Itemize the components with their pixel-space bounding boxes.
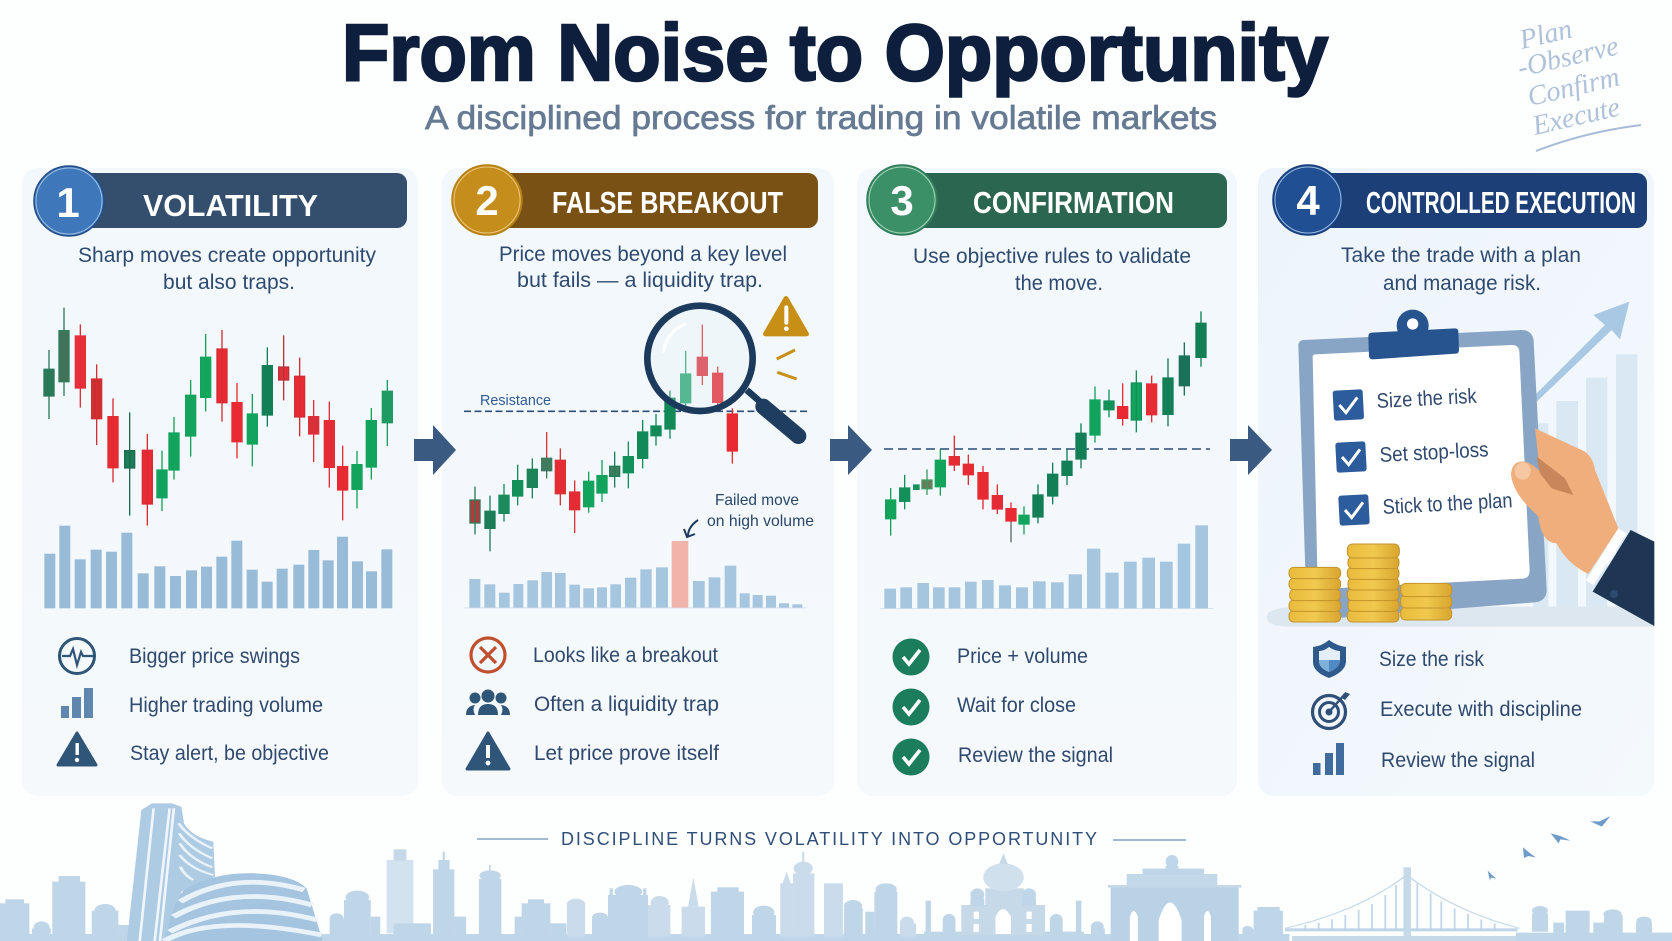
callout: failed move: on high volume bbox=[707, 513, 814, 530]
icon: group bbox=[466, 690, 510, 715]
panel: false breakout bbox=[442, 165, 834, 796]
resistance line bbox=[464, 410, 808, 412]
icon: warning triangle bbox=[765, 298, 807, 379]
header: step 2 false breakout: 2 bbox=[475, 177, 499, 224]
suspension bridge bbox=[1285, 867, 1520, 941]
icon: shield bbox=[1313, 640, 1346, 678]
volume bars bbox=[44, 526, 392, 608]
header: step 4 controlled execution bbox=[1273, 165, 1647, 235]
clipboard bbox=[1303, 310, 1542, 615]
icon: check bbox=[892, 638, 930, 676]
checkbox 1 bbox=[1333, 389, 1364, 421]
header: step 4 controlled execution: 4 bbox=[1296, 177, 1320, 224]
item text: Higher trading volume bbox=[129, 694, 323, 717]
header: step 1 volatility bbox=[34, 166, 407, 236]
panel: controlled execution bbox=[1258, 165, 1654, 796]
panel: volatility bbox=[22, 166, 418, 796]
icon: cross circle bbox=[471, 638, 505, 672]
checklist text: Set stop-loss bbox=[1379, 438, 1489, 467]
arrow 1 bbox=[414, 425, 456, 475]
title: From Noise to Opportunity bbox=[342, 8, 1328, 97]
confirmation level line bbox=[884, 448, 1210, 450]
item text: Price + volume bbox=[957, 645, 1088, 668]
skyline right: monuments and bridge bbox=[836, 853, 1672, 941]
item text: Execute with discipline bbox=[1380, 698, 1582, 721]
icon: check bbox=[892, 688, 930, 726]
handwritten note: Execute bbox=[1529, 92, 1623, 142]
skyline left: exchange tower and towers bbox=[0, 849, 836, 941]
checkbox 2 bbox=[1335, 441, 1367, 473]
handwritten note: -Observe bbox=[1515, 31, 1622, 84]
description: the move. bbox=[1015, 272, 1103, 295]
arrow 3 bbox=[1230, 425, 1272, 475]
item text: Often a liquidity trap bbox=[534, 693, 719, 716]
birds bbox=[1488, 816, 1610, 881]
footer tagline: DISCIPLINE TURNS VOLATILITY INTO OPPORTUNITY bbox=[561, 829, 1097, 849]
icon: bars bbox=[61, 688, 93, 718]
item text: Review the signal bbox=[958, 744, 1113, 767]
handwritten note bbox=[1515, 14, 1641, 151]
handwritten note: Plan bbox=[1516, 14, 1575, 56]
arrow 2 bbox=[830, 425, 872, 475]
description bbox=[913, 245, 1191, 295]
description: Take the trade with a plan bbox=[1341, 244, 1581, 267]
icon: warning bbox=[467, 733, 509, 769]
icon: warning bbox=[58, 733, 96, 765]
candlestick chart: confirmation bbox=[886, 311, 1206, 542]
icon: pulse bbox=[60, 638, 94, 674]
item text: Wait for close bbox=[957, 694, 1076, 717]
header: step 2 false breakout: FALSE BREAKOUT bbox=[552, 185, 783, 220]
description: but fails — a liquidity trap. bbox=[517, 269, 763, 292]
subtitle: A disciplined process for trading in volatile markets bbox=[425, 99, 1217, 136]
checklist text: Stick to the plan bbox=[1382, 489, 1513, 519]
candlestick chart: choppy bbox=[44, 308, 392, 526]
header: step 3 confirmation: CONFIRMATION bbox=[973, 185, 1174, 220]
magnifier bbox=[647, 306, 798, 436]
item text: Looks like a breakout bbox=[533, 644, 718, 667]
description bbox=[78, 244, 376, 294]
item text: Size the risk bbox=[1379, 648, 1484, 671]
description: but also traps. bbox=[163, 271, 295, 294]
item text: Let price prove itself bbox=[534, 742, 719, 765]
handwritten note: Confirm bbox=[1525, 62, 1623, 113]
header: step 3 confirmation: 3 bbox=[890, 177, 914, 224]
header: step 1 volatility: 1 bbox=[56, 179, 80, 226]
item text: Stay alert, be objective bbox=[130, 742, 329, 765]
panel: confirmation bbox=[857, 165, 1237, 796]
checkbox 3 bbox=[1338, 494, 1370, 526]
volume bars bbox=[464, 541, 807, 608]
item text: Review the signal bbox=[1381, 749, 1535, 772]
coins bbox=[1289, 544, 1452, 622]
description bbox=[499, 243, 787, 292]
callout: failed move: Failed move bbox=[715, 492, 799, 509]
checklist text: Size the risk bbox=[1376, 385, 1478, 413]
exchange tower bbox=[127, 803, 323, 941]
hand bbox=[1511, 428, 1654, 626]
description: and manage risk. bbox=[1383, 272, 1541, 295]
description: Sharp moves create opportunity bbox=[78, 244, 376, 267]
volume bars bbox=[880, 525, 1213, 609]
icon: check bbox=[892, 738, 930, 776]
description: Use objective rules to validate bbox=[913, 245, 1191, 268]
icon: target bbox=[1312, 692, 1350, 728]
callout: failed move bbox=[684, 492, 814, 537]
icon: bars bbox=[1313, 743, 1344, 775]
description bbox=[1341, 244, 1581, 295]
resistance label: Resistance bbox=[480, 392, 551, 409]
header: step 3 confirmation bbox=[867, 165, 1227, 235]
description: Price moves beyond a key level bbox=[499, 243, 787, 266]
candlestick chart: false breakout bbox=[470, 325, 737, 551]
header: step 2 false breakout bbox=[452, 165, 818, 235]
item text: Bigger price swings bbox=[129, 645, 300, 668]
growth chart backdrop bbox=[1267, 302, 1654, 627]
header: step 1 volatility: VOLATILITY bbox=[143, 188, 318, 223]
